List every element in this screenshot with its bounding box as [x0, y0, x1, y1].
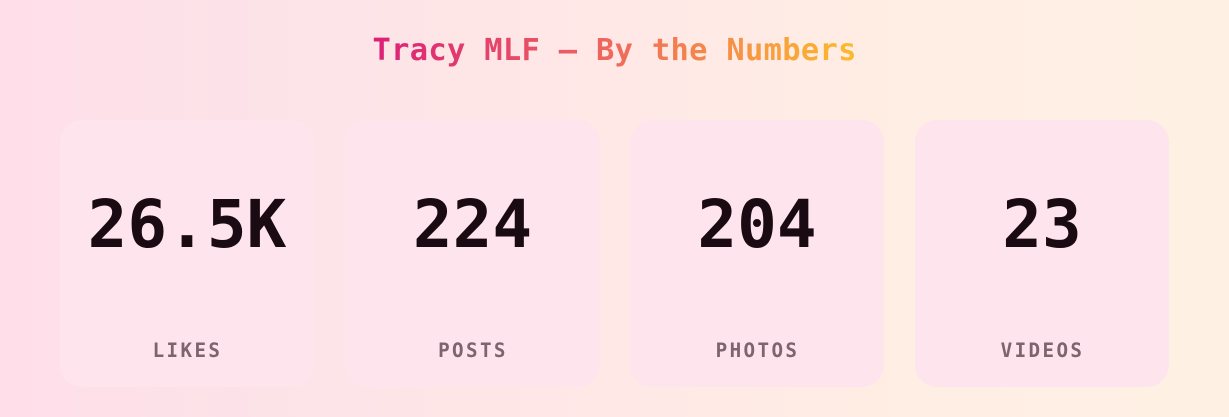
- photos label: PHOTOS: [716, 339, 799, 362]
- videos value: 23: [1002, 186, 1082, 263]
- panel: posts: [345, 120, 600, 387]
- panel: likes: [60, 120, 314, 387]
- title: Tracy MLF — By the Numbers: [372, 33, 857, 68]
- photos value: 204: [697, 186, 817, 263]
- videos label: VIDEOS: [1001, 339, 1084, 362]
- likes value: 26.5K: [88, 186, 286, 263]
- panel: videos: [915, 120, 1169, 387]
- posts value: 224: [413, 186, 532, 263]
- posts label: POSTS: [438, 339, 508, 362]
- panel: photos: [630, 120, 884, 387]
- likes label: LIKES: [153, 339, 222, 362]
